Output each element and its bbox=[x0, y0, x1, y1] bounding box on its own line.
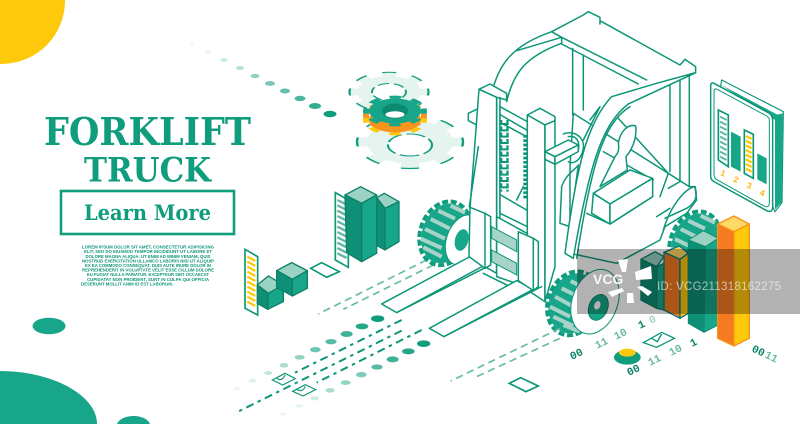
forklift bbox=[382, 12, 729, 343]
light gear bottom bbox=[357, 116, 463, 168]
tall orange bar bbox=[718, 216, 749, 346]
steering wheel bbox=[560, 133, 583, 227]
mast right post bbox=[527, 108, 555, 302]
fork left bbox=[382, 207, 510, 313]
body text: REPREHENDERIT IN VOLUPTATE VELIT ESSE CILLUM DOLORE bbox=[82, 268, 214, 273]
teal blob bottom left bbox=[0, 371, 97, 424]
overhead cross member bbox=[545, 140, 578, 164]
binary labels: 1 bbox=[688, 337, 700, 351]
title: FORKLIFT bbox=[44, 109, 251, 154]
bar 3 bbox=[744, 130, 753, 178]
binary labels: 0 bbox=[647, 314, 659, 328]
watermark logo bbox=[593, 259, 652, 303]
rear posts bbox=[573, 48, 689, 188]
bar 2 bbox=[731, 132, 741, 172]
body text: LOREM IPSUM DOLOR SIT AMET, CONSECTETUR ADIPISICING bbox=[82, 244, 215, 250]
carriage grey panels bbox=[492, 227, 517, 275]
mast rails and chain bbox=[500, 107, 527, 227]
small orange bar bbox=[664, 246, 688, 318]
body text: CUPIDATAT NON PROIDENT, SUNT IN CULPA QUI OFFICIA bbox=[87, 277, 210, 282]
binary labels: 10 bbox=[612, 327, 630, 344]
dashed data lines bbox=[234, 315, 560, 415]
small dark bar bbox=[641, 252, 664, 310]
dashed guide lines bbox=[318, 260, 433, 314]
body text: EX EA COMMODO CONSEQUAT. DUIS AUTE IRURE DOLOR IN bbox=[85, 263, 211, 268]
front wheel bbox=[538, 263, 628, 343]
body text: DOLORE MAGNA ALIQUA. UT ENIM AD MINIM VENIAM, QUIS bbox=[86, 254, 211, 259]
seat bbox=[592, 125, 653, 224]
outline tile bbox=[509, 378, 538, 392]
envelope bbox=[643, 332, 674, 347]
counterweight body bbox=[570, 113, 697, 263]
body text: DESERUNT MOLLIT ANIM ID EST LABORUM. bbox=[81, 281, 173, 286]
fork right bbox=[429, 232, 542, 337]
light dashes bbox=[451, 328, 560, 381]
light gear top bbox=[350, 72, 428, 112]
small teal ellipse bottom bbox=[117, 416, 150, 424]
gears bbox=[350, 72, 463, 168]
coloured gear bbox=[366, 97, 424, 134]
bar labels: 1 bbox=[719, 168, 727, 179]
binary labels: 1 bbox=[636, 319, 648, 333]
mast lower frame bbox=[497, 217, 545, 293]
button bbox=[614, 349, 641, 365]
envelope one bbox=[272, 373, 295, 385]
panel back bbox=[720, 80, 783, 212]
bar labels: 3 bbox=[745, 180, 753, 191]
binary labels: 00 bbox=[625, 363, 643, 380]
title: TRUCK bbox=[84, 150, 212, 190]
bar 4 bbox=[757, 153, 767, 184]
rear right wheel bbox=[661, 204, 729, 282]
dotted line upper bbox=[189, 44, 336, 117]
binary labels: 10 bbox=[667, 343, 685, 360]
binary labels: 11 bbox=[762, 350, 780, 367]
bar labels: 4 bbox=[758, 187, 766, 198]
right roll bar bbox=[565, 73, 696, 258]
body text: EU FUGIAT NULLA PARIATUR. EXCEPTEUR SINT OCCAECAT bbox=[87, 272, 209, 277]
small teal ellipse left bbox=[32, 318, 66, 334]
body text: NOSTRUD EXERCITATION ULLAMCO LABORIS NISI UT ALIQUIP bbox=[82, 258, 214, 263]
fender bbox=[587, 118, 696, 230]
right bars bbox=[614, 216, 749, 365]
outline tile bbox=[311, 263, 339, 277]
body text: ELIT, SED DO EIUSMOD TEMPOR INCIDIDUNT UT LABORE ET bbox=[84, 249, 212, 254]
bar labels: 2 bbox=[732, 174, 740, 185]
watermark band bbox=[577, 249, 800, 314]
button: learn more bbox=[61, 191, 234, 234]
body text bbox=[81, 244, 215, 286]
yellow panel bbox=[245, 249, 258, 315]
binary labels: 11 bbox=[593, 336, 611, 353]
watermark id: ID: VCG211318162275 bbox=[657, 281, 781, 293]
tall bar bbox=[345, 187, 377, 262]
binary labels: 00 bbox=[749, 344, 766, 360]
envelope two bbox=[293, 385, 316, 396]
dot row two bbox=[280, 340, 430, 415]
cube small bbox=[257, 276, 283, 309]
rear left wheel bbox=[411, 194, 488, 272]
yellow corner circle bbox=[0, 0, 65, 64]
hatched panel bbox=[335, 193, 348, 267]
cube large bbox=[277, 263, 307, 296]
teal bar bbox=[688, 231, 718, 332]
right panel chart bbox=[711, 80, 783, 212]
bar labels bbox=[719, 168, 766, 198]
short bar bbox=[376, 193, 399, 250]
dark dashes bbox=[236, 320, 422, 413]
dot row one bbox=[234, 315, 384, 390]
binary labels: 00 bbox=[568, 347, 586, 364]
mast left post bbox=[468, 84, 507, 277]
roof bbox=[552, 12, 696, 95]
left chart: yellow panel and cubes bbox=[245, 187, 433, 315]
binary labels: 11 bbox=[646, 353, 664, 370]
title bbox=[44, 109, 251, 190]
panel front bbox=[711, 83, 773, 211]
left roll bar bbox=[492, 32, 562, 102]
binary labels bbox=[568, 314, 780, 380]
watermark logo: VCG bbox=[593, 271, 623, 287]
button: learn more: Learn More bbox=[84, 200, 211, 225]
bar 1 bbox=[718, 110, 728, 167]
